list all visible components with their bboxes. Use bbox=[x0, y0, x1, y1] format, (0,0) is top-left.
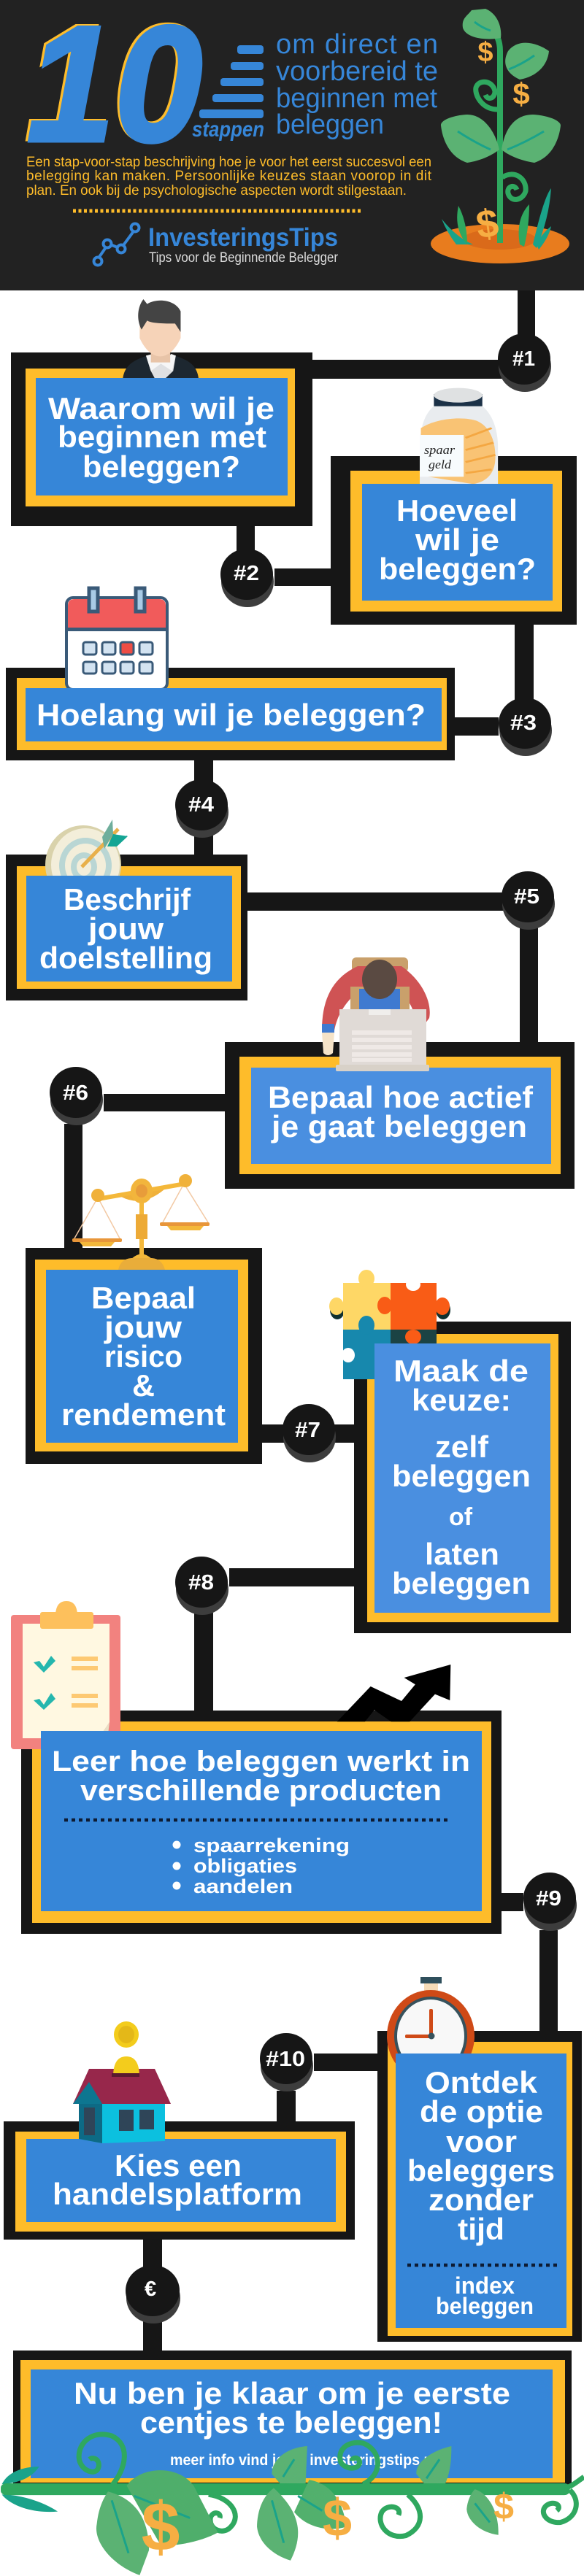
text: Maak de bbox=[393, 1354, 529, 1388]
text bbox=[61, 1281, 226, 1432]
heading subtitle: beginnen met bbox=[276, 83, 437, 114]
heading subtitle: om direct en bbox=[276, 29, 438, 60]
jar label text: spaar bbox=[424, 443, 455, 457]
panel: final call to action bbox=[13, 2351, 572, 2485]
text: Waarom wil je bbox=[48, 391, 274, 425]
text: jouw bbox=[104, 1310, 182, 1344]
subtext bbox=[436, 2272, 534, 2319]
text: tijd bbox=[458, 2212, 504, 2246]
connectors between steps bbox=[64, 290, 558, 2351]
icon: dollar signs: $ bbox=[142, 2488, 180, 2566]
icon: target with arrow bbox=[45, 820, 128, 904]
text: handelsplatform bbox=[53, 2177, 302, 2211]
text: of bbox=[449, 1503, 473, 1531]
text: & bbox=[132, 1368, 155, 1403]
text: beleggers bbox=[407, 2153, 555, 2188]
text: Bepaal hoe actief bbox=[268, 1080, 534, 1114]
text: Leer hoe beleggen werkt in bbox=[52, 1746, 470, 1778]
text: doelstelling bbox=[39, 941, 212, 975]
heading subtitle: voorbereid te bbox=[276, 56, 438, 87]
marker #1 bbox=[498, 333, 551, 392]
text: rendement bbox=[61, 1397, 226, 1432]
marker #9 bbox=[523, 1873, 577, 1931]
icon: puzzle bbox=[329, 1270, 450, 1379]
illustration: money vine bbox=[1, 2434, 584, 2575]
icon: house with coins bbox=[73, 2021, 171, 2143]
illustration: money plant bbox=[431, 9, 569, 263]
panel: step 3 hoelang bbox=[6, 588, 455, 760]
text: wil je bbox=[415, 522, 499, 557]
marker #2: #2 bbox=[234, 562, 259, 585]
text: beleggen bbox=[392, 1566, 531, 1600]
subtext: beleggen bbox=[436, 2293, 534, 2319]
text bbox=[53, 2148, 302, 2211]
text bbox=[379, 493, 536, 586]
marker #7: #7 bbox=[295, 1419, 320, 1442]
intro paragraph: belegging kan maken. Persoonlijke keuzes staan voorop in dit bbox=[26, 169, 432, 184]
panel: step 4 doelstelling bbox=[6, 820, 247, 1000]
text bbox=[39, 882, 212, 975]
text: Hoelang wil je beleggen? bbox=[36, 698, 426, 732]
panel: step 5 hoe actief bbox=[225, 957, 575, 1189]
panel: step 8 producten bbox=[11, 1601, 502, 1934]
icon: logo chart line bbox=[93, 223, 139, 266]
icon: dollar signs: $ bbox=[323, 2489, 352, 2548]
text: centjes te beleggen! bbox=[140, 2405, 442, 2440]
bullet list bbox=[172, 1835, 350, 1897]
icon: dollar signs: $ bbox=[477, 37, 493, 68]
marker #5: #5 bbox=[514, 885, 539, 909]
text bbox=[392, 1354, 531, 1600]
jar label text bbox=[424, 443, 455, 471]
icon: dollar signs: $ bbox=[474, 201, 502, 247]
text: je gaat beleggen bbox=[271, 1109, 527, 1144]
marker #9: #9 bbox=[536, 1887, 561, 1910]
marker #4 bbox=[175, 779, 228, 838]
icon: calendar bbox=[66, 588, 167, 690]
bullet list: spaarrekening bbox=[193, 1835, 350, 1856]
text: de optie bbox=[420, 2094, 543, 2129]
text bbox=[74, 2376, 510, 2440]
text: beginnen met bbox=[58, 420, 266, 454]
text bbox=[268, 1080, 534, 1144]
logo: InvesteringsTips bbox=[93, 223, 339, 266]
icon: dollar signs bbox=[474, 37, 530, 247]
header panel bbox=[0, 0, 584, 290]
icon: person at laptop bbox=[322, 957, 430, 1071]
text bbox=[52, 1746, 470, 1807]
text: Beschrijf bbox=[64, 882, 191, 917]
text: keuze: bbox=[412, 1383, 511, 1417]
text: zelf bbox=[435, 1430, 489, 1464]
marker #8: #8 bbox=[188, 1571, 214, 1594]
icon: dollar signs bbox=[142, 2486, 514, 2566]
text: risico bbox=[104, 1339, 182, 1373]
marker #7 bbox=[283, 1404, 336, 1462]
logo tagline: Tips voor de Beginnende Belegger bbox=[149, 250, 339, 266]
marker #6 bbox=[50, 1067, 103, 1125]
text: verschillende producten bbox=[80, 1775, 442, 1807]
icon: rising black arrow bbox=[337, 1665, 450, 1721]
text bbox=[407, 2065, 555, 2246]
marker #10: #10 bbox=[266, 2048, 305, 2071]
heading subtitle bbox=[276, 29, 438, 140]
icon: dollar signs: $ bbox=[512, 77, 530, 111]
text: Bepaal bbox=[91, 1281, 196, 1315]
text: jouw bbox=[88, 911, 164, 946]
website note: meer info vind je op investeringstips.nl bbox=[170, 2452, 437, 2469]
intro paragraph: Een stap-voor-stap beschrijving hoe je voor het eerst succesvol een bbox=[26, 155, 431, 170]
icon: balance scale bbox=[72, 1174, 210, 1270]
text: laten bbox=[425, 1537, 499, 1571]
icon: clipboard bbox=[11, 1601, 120, 1749]
text: Kies een bbox=[115, 2148, 242, 2183]
logo name: InvesteringsTips bbox=[148, 223, 338, 252]
marker euro bbox=[126, 2265, 180, 2324]
step markers bbox=[50, 333, 577, 2324]
intro paragraph: plan. En ook bij de psychologische aspecten wordt stilgestaan. bbox=[26, 183, 407, 198]
marker #3 bbox=[499, 698, 552, 756]
bullet list: obligaties bbox=[193, 1855, 297, 1877]
text: beleggen? bbox=[82, 450, 240, 484]
text: beleggen? bbox=[379, 552, 536, 586]
panel: step 9 index beleggen bbox=[377, 1977, 582, 2342]
panel: step 2 hoeveel bbox=[331, 388, 577, 625]
panel: step 6 risico en rendement bbox=[26, 1174, 262, 1464]
marker #1: #1 bbox=[512, 347, 535, 371]
icon: dollar signs: $ bbox=[493, 2486, 514, 2527]
marker euro: € bbox=[145, 2278, 156, 2301]
marker #10 bbox=[260, 2033, 313, 2091]
marker #4: #4 bbox=[188, 793, 214, 817]
icon: businessman bbox=[123, 299, 199, 378]
text: Nu ben je klaar om je eerste bbox=[74, 2376, 510, 2410]
icon: stopwatch bbox=[387, 1977, 474, 2082]
marker #6: #6 bbox=[63, 1081, 88, 1105]
jar label text: geld bbox=[429, 458, 452, 471]
marker #8 bbox=[175, 1557, 228, 1615]
heading word stappen: stappen bbox=[192, 117, 264, 142]
text: Ontdek bbox=[425, 2065, 538, 2099]
icon: savings jar bbox=[420, 388, 498, 484]
panel: step 10 handelsplatform bbox=[4, 2021, 355, 2240]
bullet list: aandelen bbox=[193, 1875, 293, 1897]
text: voor bbox=[446, 2124, 517, 2159]
subtext: index bbox=[455, 2272, 515, 2299]
heading subtitle: beleggen bbox=[276, 109, 384, 140]
marker #3: #3 bbox=[510, 712, 537, 735]
intro paragraph bbox=[26, 155, 432, 198]
text: Hoeveel bbox=[396, 493, 518, 528]
icon: stairs bars bbox=[199, 45, 264, 118]
text bbox=[48, 391, 274, 484]
marker #2 bbox=[220, 549, 274, 607]
marker #5 bbox=[502, 871, 555, 930]
panel: step 1 waarom bbox=[11, 299, 312, 526]
panel: step 7 keuze bbox=[329, 1270, 571, 1633]
text: beleggen bbox=[392, 1459, 531, 1493]
text: zonder bbox=[429, 2183, 534, 2217]
